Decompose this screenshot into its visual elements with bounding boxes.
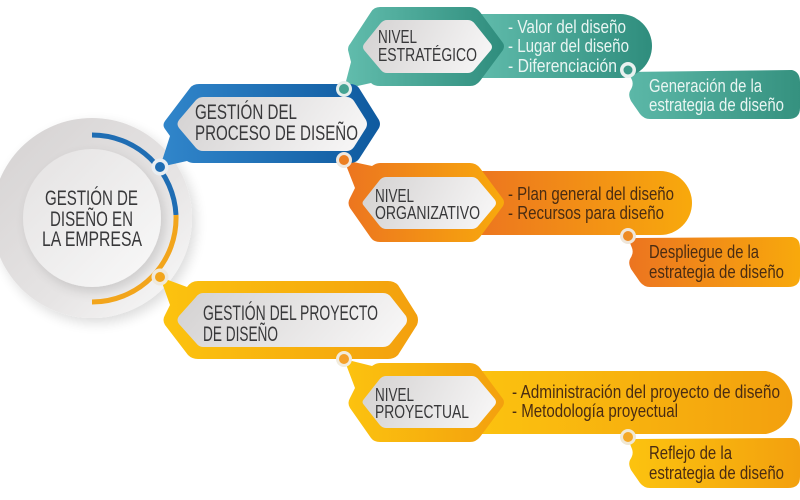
badge: nivel proyectual: NIVEL bbox=[375, 384, 414, 405]
sub-panel: despliegue de la estrategia: Despliegue de la bbox=[649, 241, 760, 262]
central circle: gestión de diseño en la empresa bbox=[0, 118, 192, 318]
connector dot: orange list bbox=[620, 228, 636, 244]
connector dot: proceso to organizativo bbox=[336, 152, 352, 168]
central circle: gestión de diseño en la empresa: GESTIÓN DE bbox=[45, 187, 138, 210]
list pill: plan general, recursos bbox=[470, 171, 692, 235]
badge: nivel organizativo: NIVEL bbox=[375, 185, 414, 206]
list pill: administración, metodología bbox=[470, 371, 792, 434]
connector dot: proceso to estratégico bbox=[336, 81, 352, 97]
badge: nivel estratégico bbox=[344, 7, 504, 89]
panel: gestión del proyecto de diseño bbox=[160, 277, 418, 359]
sub-panel: generación de la estrategia: Generación de la bbox=[649, 75, 763, 96]
badge: nivel proyectual bbox=[344, 359, 504, 442]
sub-panel: generación de la estrategia bbox=[628, 70, 800, 119]
panel: nivel organizativo bbox=[344, 160, 800, 287]
badge: nivel organizativo bbox=[344, 160, 504, 242]
list pill: valor, lugar, diferenciación: - Diferenciación bbox=[508, 55, 617, 76]
badge: nivel estratégico: ESTRATÉGICO bbox=[378, 44, 477, 65]
sub-panel: despliegue de la estrategia bbox=[628, 237, 800, 287]
central circle: gestión de diseño en la empresa: LA EMPRESA bbox=[42, 228, 142, 251]
connector dot: proyecto to proyectual bbox=[336, 351, 352, 367]
list pill: valor, lugar, diferenciación: - Valor del diseño bbox=[508, 16, 626, 37]
badge: nivel organizativo: ORGANIZATIVO bbox=[375, 202, 480, 223]
panel: gestión del proceso de diseño: GESTIÓN DEL bbox=[195, 101, 297, 124]
panel: nivel proyectual bbox=[344, 359, 800, 488]
panel: gestión del proceso de diseño bbox=[160, 84, 380, 167]
list pill: valor, lugar, diferenciación bbox=[470, 14, 652, 78]
sub-panel: reflejo de la estrategia bbox=[628, 438, 800, 488]
panel: gestión del proyecto de diseño: GESTIÓN DEL PROYECTO bbox=[203, 302, 378, 325]
central circle: gestión de diseño en la empresa: DISEÑO EN bbox=[50, 207, 133, 231]
connector dot: teal list bbox=[620, 62, 636, 78]
connector dot: yellow list bbox=[620, 429, 636, 445]
badge: nivel estratégico: NIVEL bbox=[378, 26, 417, 47]
list pill: plan general, recursos: - Recursos para diseño bbox=[508, 202, 664, 223]
list pill: administración, metodología: - Metodología proyectual bbox=[512, 400, 678, 421]
connector dot: circle to proyecto bbox=[152, 268, 168, 286]
sub-panel: reflejo de la estrategia: Reflejo de la bbox=[649, 442, 733, 463]
panel: nivel estratégico bbox=[344, 7, 800, 119]
connector dot: circle to proceso bbox=[152, 158, 168, 176]
list pill: valor, lugar, diferenciación: - Lugar del diseño bbox=[508, 35, 629, 56]
panel: gestión del proceso de diseño: PROCESO DE DISEÑO bbox=[195, 121, 358, 145]
badge: nivel proyectual: PROYECTUAL bbox=[375, 401, 469, 422]
list pill: plan general, recursos: - Plan general del diseño bbox=[508, 183, 674, 204]
panel: gestión del proyecto de diseño: DE DISEÑO bbox=[203, 322, 278, 346]
